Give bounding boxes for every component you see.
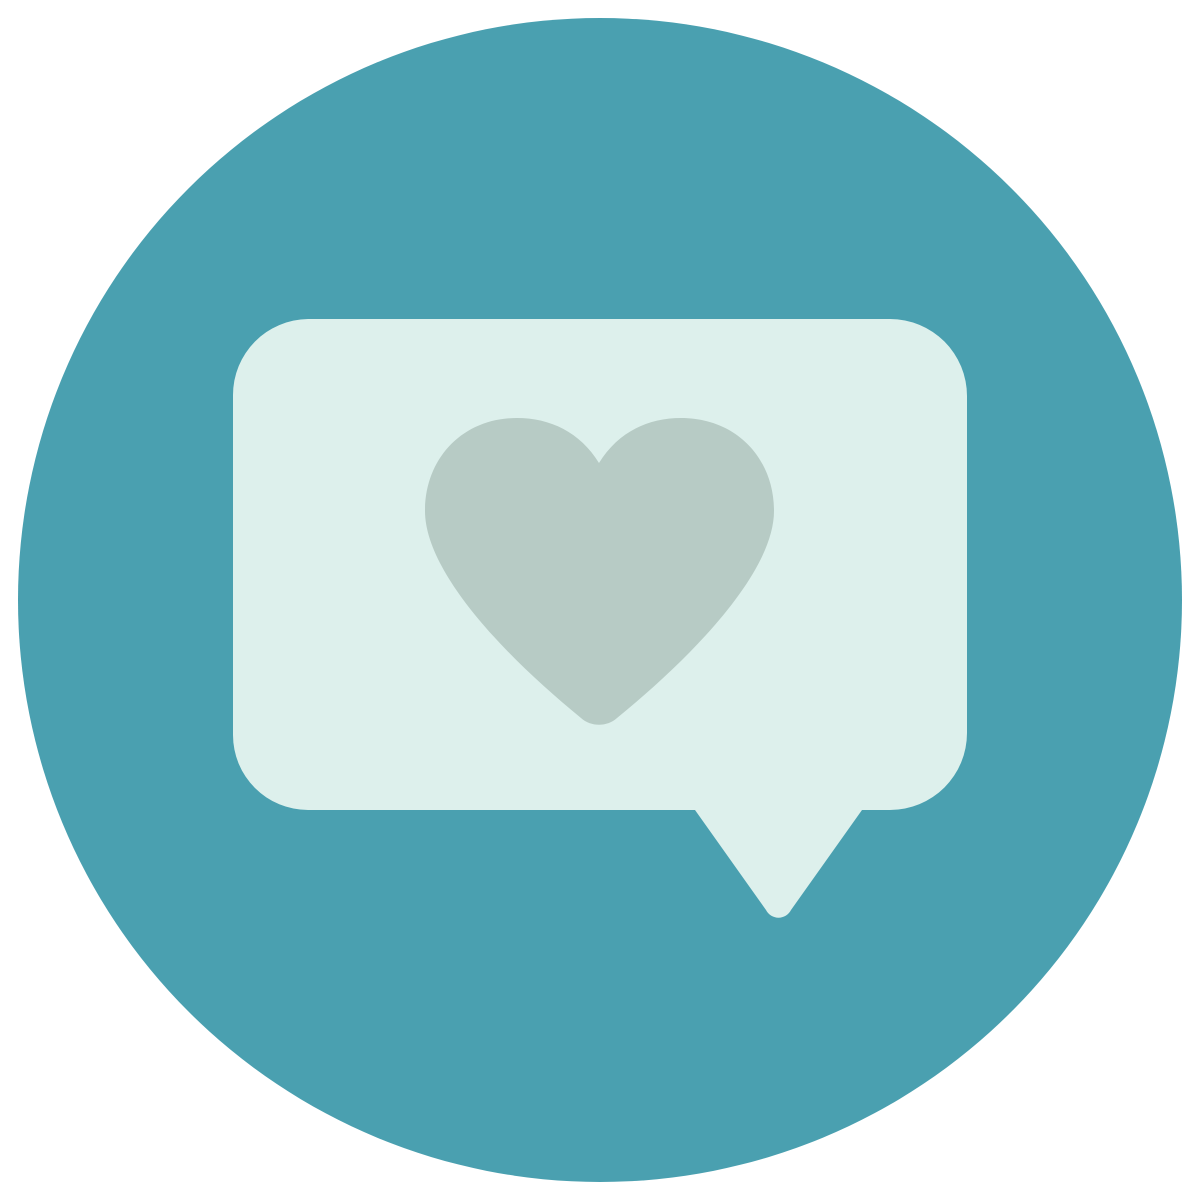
speech bubble xyxy=(233,319,967,918)
heart xyxy=(425,418,774,725)
